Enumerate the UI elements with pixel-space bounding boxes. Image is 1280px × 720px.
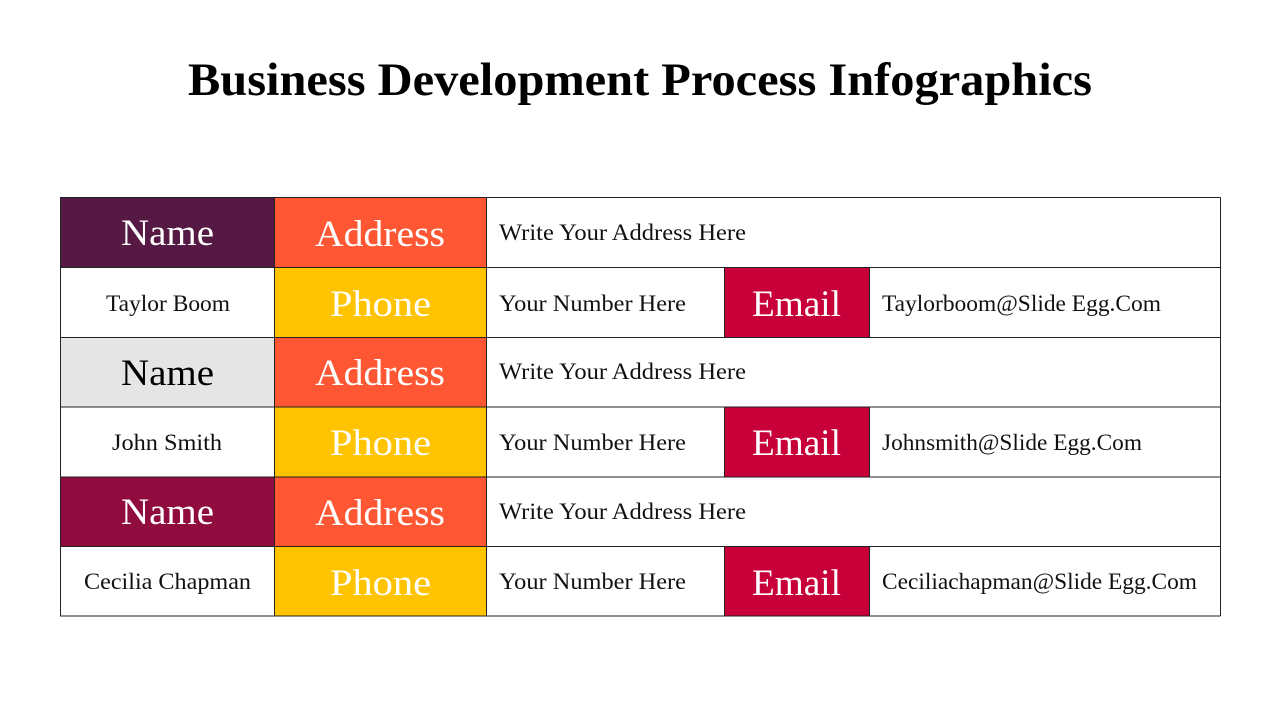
row 5: name header: Name bbox=[121, 492, 214, 533]
table bbox=[60, 198, 1220, 616]
row 6: phone label: Phone bbox=[330, 563, 431, 604]
row 6: email label bbox=[724, 547, 870, 616]
row 3: address label bbox=[274, 338, 486, 408]
row 6: email label: Email bbox=[752, 563, 841, 604]
row 2: phone label: Phone bbox=[330, 284, 431, 325]
row 6: phone value: Your Number Here bbox=[499, 569, 686, 594]
row 4: phone value: Your Number Here bbox=[499, 430, 686, 455]
row 3: name header bbox=[60, 338, 274, 408]
row 4: phone label bbox=[274, 408, 486, 478]
row 2: email label: Email bbox=[752, 284, 841, 325]
row 3: name header: Name bbox=[121, 353, 214, 394]
row 5: address label: Address bbox=[315, 493, 445, 534]
row 3: address label: Address bbox=[315, 353, 445, 394]
row 6: person name: Cecilia Chapman bbox=[84, 569, 252, 594]
row 1: name header bbox=[60, 198, 274, 268]
row 1: address label: Address bbox=[315, 214, 445, 255]
row 4: email label bbox=[724, 408, 870, 478]
row 1: address value: Write Your Address Here bbox=[499, 220, 746, 245]
row 2: phone label bbox=[274, 268, 486, 338]
row 2: phone value: Your Number Here bbox=[499, 291, 686, 316]
row 5: address label bbox=[274, 478, 486, 547]
row 4: person name: John Smith bbox=[112, 430, 223, 455]
row 5: name header bbox=[60, 478, 274, 547]
row 2: email label bbox=[724, 268, 870, 338]
row 3: address value: Write Your Address Here bbox=[499, 359, 746, 384]
row 6: phone label bbox=[274, 547, 486, 616]
row 1: address label bbox=[274, 198, 486, 268]
row 1: name header: Name bbox=[121, 213, 214, 254]
row 2: person name: Taylor Boom bbox=[106, 291, 230, 316]
row 4: email value: Johnsmith@Slide Egg.Com bbox=[882, 430, 1142, 455]
row 4: phone label: Phone bbox=[330, 423, 431, 464]
row 6: email value: Ceciliachapman@Slide Egg.Com bbox=[882, 569, 1197, 594]
row 5: address value: Write Your Address Here bbox=[499, 499, 746, 524]
row 4: email label: Email bbox=[752, 423, 841, 464]
row 2: email value: Taylorboom@Slide Egg.Com bbox=[882, 291, 1161, 316]
title: Business Development Process Infographics bbox=[188, 54, 1092, 106]
